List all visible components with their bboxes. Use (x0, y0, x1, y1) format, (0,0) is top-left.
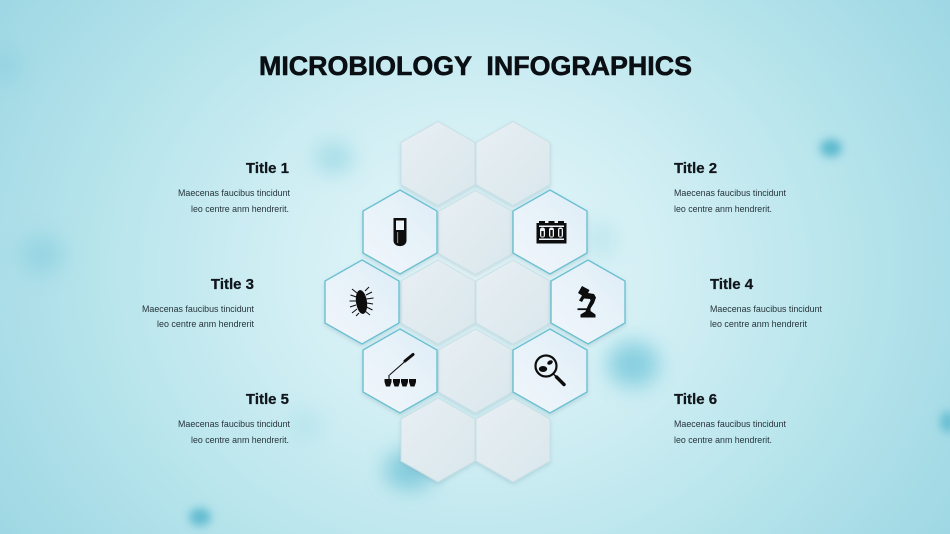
hexagon: pipette and wells (363, 329, 437, 413)
text block: title 6 (674, 391, 786, 445)
hexagon: test tube (363, 190, 437, 274)
text block: title 5: Title 5 (246, 391, 289, 408)
hexagon: test tube rack (513, 190, 587, 274)
text block: title 3: Title 3 (211, 276, 254, 293)
text block: title 2: leo centre anm hendrerit. (674, 204, 772, 214)
hexagon: magnifier (513, 329, 587, 413)
text block: title 5: leo centre anm hendrerit. (191, 435, 289, 445)
text block: title 1 (178, 160, 290, 214)
title: MICROBIOLOGY INFOGRAPHICS (259, 51, 692, 81)
hexagon: bacterium (325, 260, 399, 344)
icon: magnifier (536, 356, 564, 384)
text block: title 1: Title 1 (246, 160, 289, 177)
icon: microscope (578, 286, 596, 318)
text block: title 4: Maecenas faucibus tincidunt (710, 304, 822, 314)
text block: title 2: Title 2 (674, 160, 717, 177)
icon: test tube (394, 218, 406, 246)
text block: title 4: leo centre anm hendrerit (710, 319, 807, 329)
text block: title 3: Maecenas faucibus tincidunt (142, 304, 254, 314)
text block: title 2 (674, 160, 786, 214)
text block: title 4 (710, 276, 822, 329)
icon: pipette and wells (384, 354, 416, 386)
gray honeycomb hexagons (401, 122, 550, 482)
text block: title 5 (178, 391, 290, 445)
text block: title 6: Maecenas faucibus tincidunt (674, 419, 786, 429)
text block: title 5: Maecenas faucibus tincidunt (178, 419, 290, 429)
text block: title 3: leo centre anm hendrerit (157, 319, 254, 329)
text block: title 1: Maecenas faucibus tincidunt (178, 188, 290, 198)
text block: title 4: Title 4 (710, 276, 754, 293)
text block: title 3 (142, 276, 254, 329)
text block: title 6: Title 6 (674, 391, 717, 408)
icon: test tube rack (536, 221, 566, 244)
text block: title 2: Maecenas faucibus tincidunt (674, 188, 786, 198)
hexagon: microscope (551, 260, 625, 344)
text block: title 1: leo centre anm hendrerit. (191, 204, 289, 214)
text block: title 6: leo centre anm hendrerit. (674, 435, 772, 445)
icon: bacterium (350, 287, 374, 316)
